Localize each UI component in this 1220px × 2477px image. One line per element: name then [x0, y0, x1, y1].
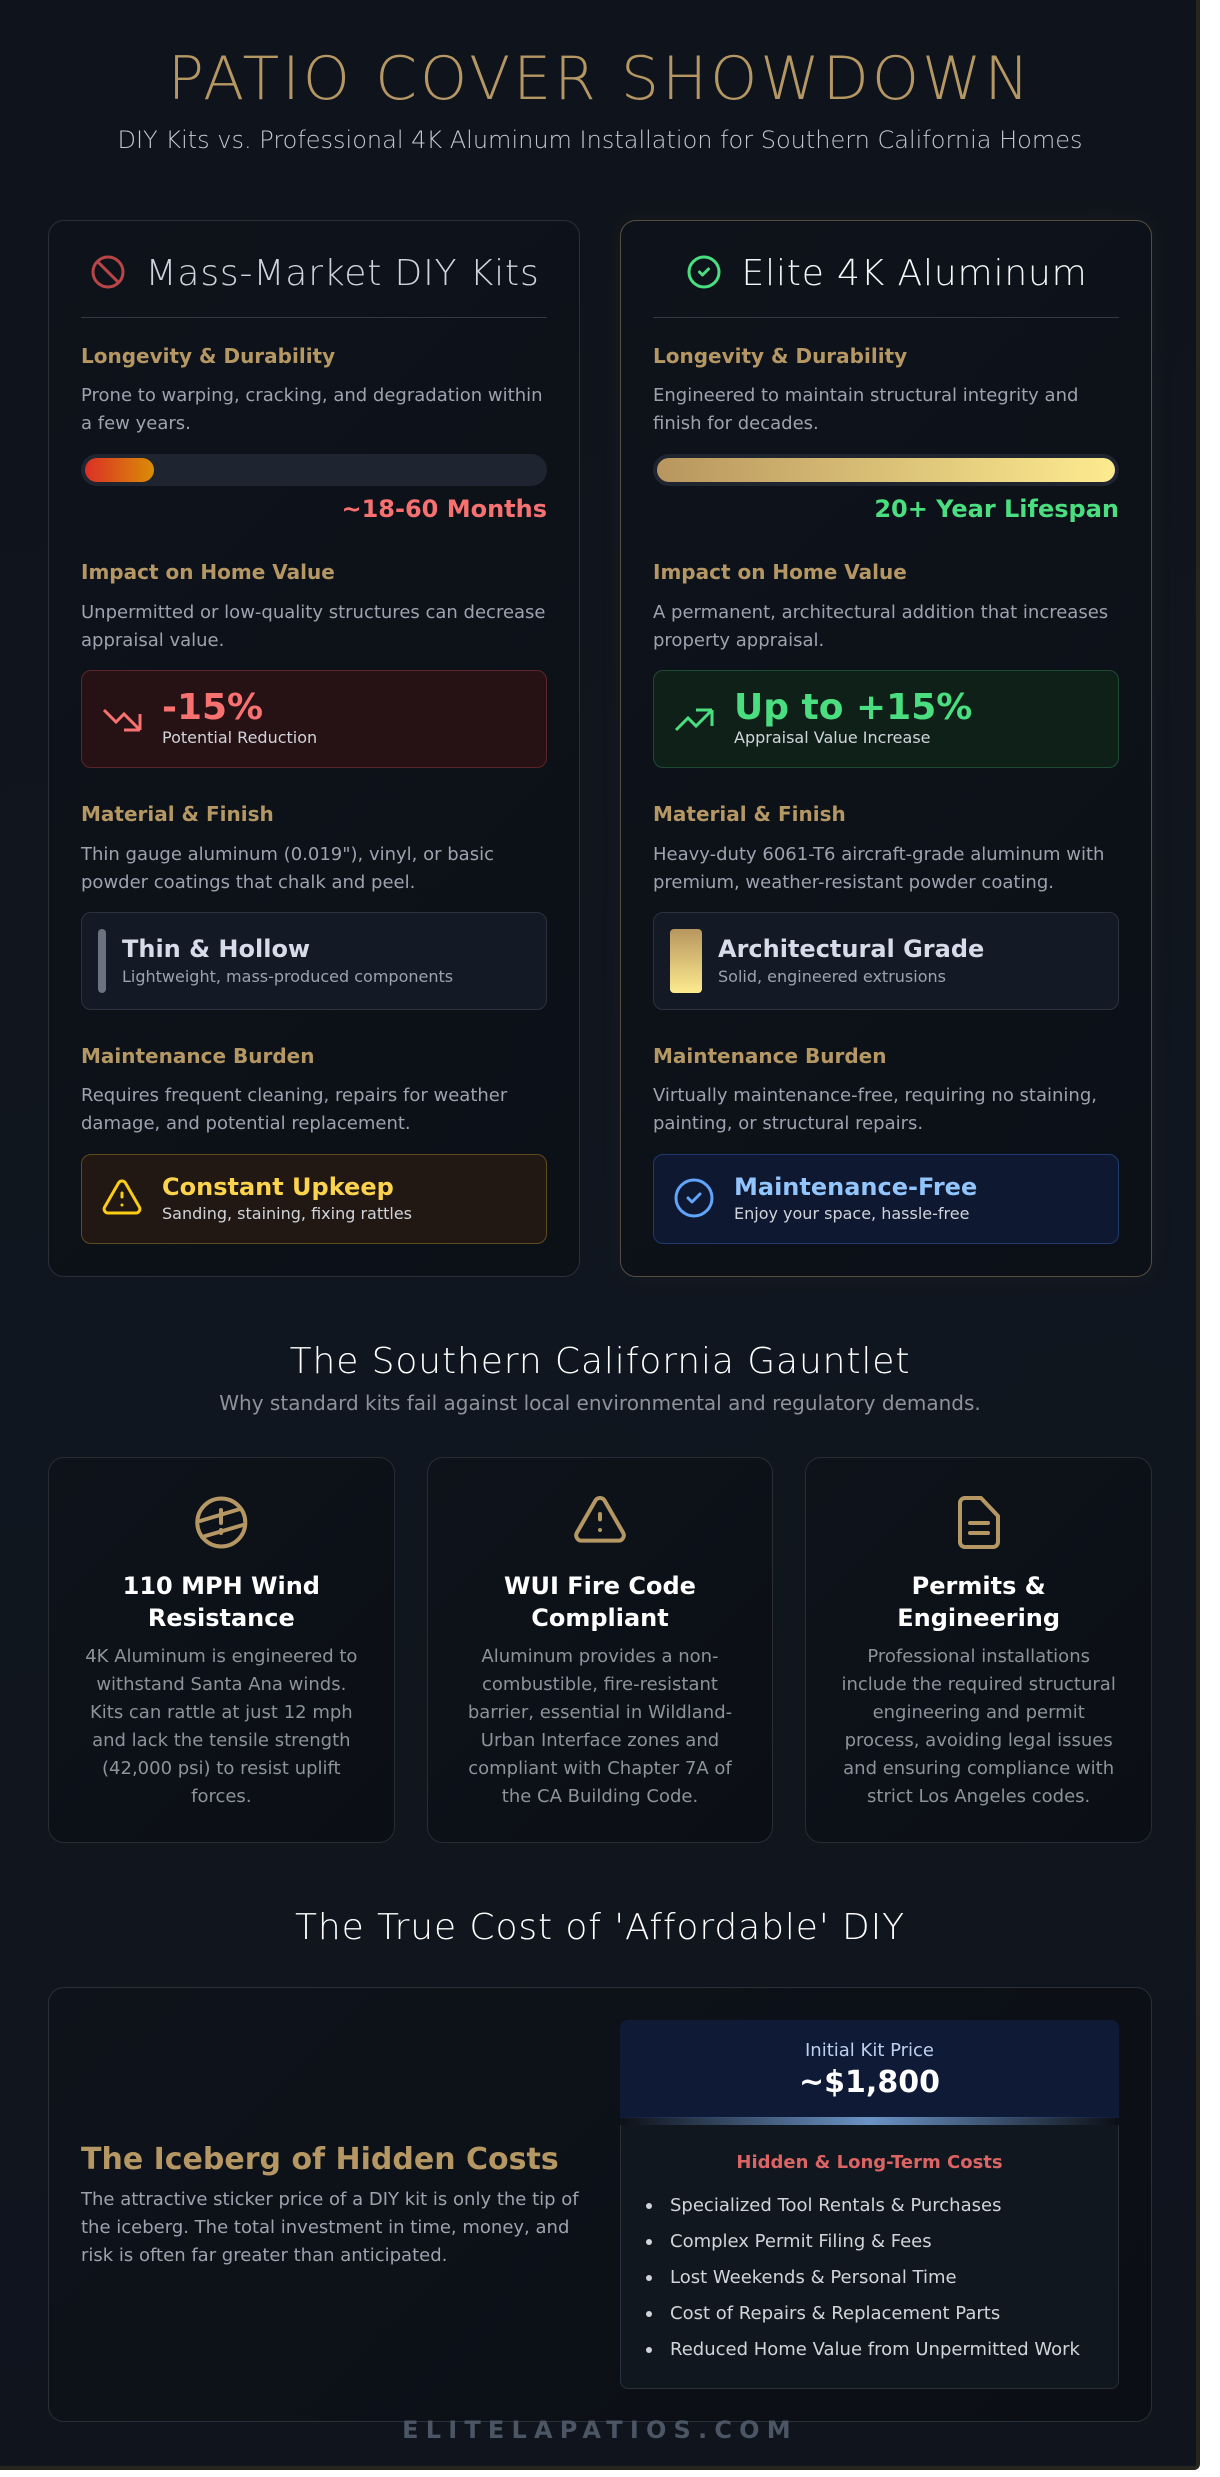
icon: wind [195, 1496, 248, 1548]
callout: potential reduction [81, 670, 547, 768]
card text: include the required structural [841, 1674, 1116, 1695]
card heading: 110 MPH Wind [123, 1572, 320, 1600]
text: home value: appraisal value. [81, 630, 224, 651]
progress bar: lifespan [653, 454, 1119, 486]
card heading: WUI Fire Code [504, 1572, 696, 1600]
card text: forces. [191, 1786, 252, 1807]
list block: hidden costs [620, 2125, 1119, 2389]
text: material [80, 844, 494, 893]
value: lifespan: ~18-60 Months [341, 495, 547, 523]
icon: warning triangle [102, 1180, 142, 1214]
stat value: Up to +15% [734, 687, 972, 728]
header divider line [653, 317, 1119, 318]
price block: initial kit price [620, 2020, 1119, 2118]
heading: iceberg: The Iceberg of Hidden Costs [81, 2142, 559, 2176]
waterline glow [620, 2117, 1119, 2125]
card heading: Permits & [912, 1572, 1046, 1600]
text: maintenance: Virtually maintenance-free, requiring no staining, [653, 1085, 1097, 1106]
heading: home value: Impact on Home Value [81, 560, 335, 584]
card text: withstand Santa Ana winds. [96, 1674, 346, 1695]
heading: maintenance: Maintenance Burden [653, 1044, 886, 1068]
heading: maintenance: Maintenance Burden [81, 1044, 314, 1068]
bullet list: Lost Weekends & Personal Time [670, 2267, 957, 2288]
bullet list: Cost of Repairs & Replacement Parts [670, 2303, 1000, 2324]
progress bar: lifespan [81, 454, 547, 486]
icon: prohibited [92, 256, 124, 288]
callout: appraisal increase [653, 670, 1119, 768]
panel title: Mass-Market DIY Kits [146, 252, 540, 294]
text: maintenance [81, 1085, 508, 1134]
text: maintenance: damage, and potential replacement. [81, 1113, 411, 1134]
panel: iceberg of hidden costs [48, 1987, 1152, 2422]
text: maintenance [653, 1085, 1097, 1134]
icon: trending up [675, 708, 714, 731]
card text: and lack the tensile strength [92, 1730, 351, 1751]
text: material: Thin gauge aluminum (0.019"), vinyl, or basic [81, 844, 494, 864]
callout detail: Enjoy your space, hassle-free [734, 1204, 969, 1223]
callout title: Architectural Grade [718, 935, 984, 963]
card heading [123, 1572, 320, 1632]
title: PATIO COVER SHOWDOWN [168, 44, 1032, 114]
card text: Aluminum provides a non- [481, 1646, 719, 1666]
icon: check circle [674, 1178, 714, 1218]
icon: check circle [688, 256, 720, 288]
panel: permits [805, 1457, 1152, 1843]
callout: architectural grade [653, 912, 1119, 1010]
card text [841, 1646, 1116, 1807]
stat label: Potential Reduction [162, 728, 317, 747]
icon: thin profile bar [98, 929, 106, 993]
section heading: true cost: The True Cost of 'Affordable' DIY [295, 1906, 905, 1948]
footer brand: ELITELAPATIOS.COM [402, 2416, 798, 2444]
card text: (42,000 psi) to resist uplift [102, 1758, 341, 1779]
icon: document [958, 1496, 1000, 1549]
card text: Professional installations [867, 1646, 1090, 1666]
card text: strict Los Angeles codes. [867, 1786, 1090, 1807]
card text: Urban Interface zones and [481, 1730, 719, 1751]
text: longevity [653, 385, 1078, 434]
stat value: -15% [162, 687, 263, 728]
card heading [504, 1572, 696, 1632]
text: home value: Unpermitted or low-quality structures can decrease [81, 602, 546, 623]
panel title: Elite 4K Aluminum [742, 252, 1088, 294]
text: material: premium, weather-resistant powder coating. [653, 872, 1054, 893]
card heading [897, 1572, 1060, 1632]
callout detail: Sanding, staining, fixing rattles [162, 1204, 412, 1223]
card text: barrier, essential in Wildland- [468, 1702, 732, 1723]
list heading: Hidden & Long-Term Costs [736, 2152, 1003, 2172]
section subheading: gauntlet: Why standard kits fail against local environmental and regulatory demands. [219, 1391, 981, 1415]
bullet list: Specialized Tool Rentals & Purchases [670, 2195, 1001, 2216]
progress fill [657, 458, 1115, 482]
icon: trending down [103, 709, 142, 732]
heading: material: Material & Finish [81, 802, 274, 826]
price label: Initial Kit Price [805, 2040, 934, 2061]
card text: the CA Building Code. [502, 1786, 698, 1807]
text: home value: A permanent, architectural addition that increases [653, 602, 1108, 623]
card heading: Resistance [148, 1604, 295, 1632]
subtitle: DIY Kits vs. Professional 4K Aluminum Installation for Southern California Homes [118, 126, 1082, 154]
card text [85, 1646, 357, 1807]
card text: and ensuring compliance with [843, 1758, 1114, 1779]
panel: mass-market DIY kits [48, 220, 580, 1277]
card text: process, avoiding legal issues [845, 1730, 1113, 1751]
bullet list: Reduced Home Value from Unpermitted Work [670, 2339, 1080, 2360]
card text: Kits can rattle at just 12 mph [90, 1702, 353, 1723]
heading: material: Material & Finish [653, 802, 846, 826]
panel: elite 4K aluminum [620, 220, 1152, 1277]
text: iceberg: risk is often far greater than anticipated. [81, 2245, 447, 2266]
card text: combustible, fire-resistant [482, 1674, 718, 1695]
panel: fire code [427, 1457, 773, 1843]
text: home value [653, 602, 1108, 651]
text: home value [81, 602, 546, 651]
text: iceberg: The attractive sticker price of a DIY kit is only the tip of [81, 2189, 579, 2210]
value: lifespan: 20+ Year Lifespan [874, 495, 1119, 523]
card text: compliant with Chapter 7A of [468, 1758, 732, 1779]
callout: thin and hollow [81, 912, 547, 1010]
panel: wind resistance [48, 1457, 395, 1843]
text: iceberg [80, 2189, 579, 2266]
callout: constant upkeep [81, 1154, 547, 1244]
price value: ~$1,800 [799, 2065, 940, 2100]
text: home value: property appraisal. [653, 630, 824, 651]
text: maintenance: painting, or structural repairs. [653, 1113, 923, 1134]
card text: engineering and permit [873, 1702, 1085, 1723]
text: longevity: finish for decades. [653, 413, 819, 434]
callout title: Maintenance-Free [734, 1172, 977, 1200]
icon: solid profile bar [670, 929, 702, 993]
text: material: powder coatings that chalk and peel. [81, 872, 415, 893]
text: material [653, 844, 1104, 893]
bullet list [646, 2195, 1080, 2360]
text: material: Heavy-duty 6061-T6 aircraft-grade aluminum with [653, 844, 1104, 864]
heading: home value: Impact on Home Value [653, 560, 907, 584]
text: longevity [81, 385, 543, 434]
text: longevity: Prone to warping, cracking, and degradation within [81, 385, 543, 406]
heading: longevity: Longevity & Durability [81, 344, 335, 368]
callout title: Constant Upkeep [162, 1172, 394, 1200]
progress fill [85, 458, 154, 482]
callout title: Thin & Hollow [122, 935, 310, 963]
stat label: Appraisal Value Increase [734, 728, 930, 747]
callout detail: Lightweight, mass-produced components [122, 967, 453, 986]
text: maintenance: Requires frequent cleaning, repairs for weather [81, 1085, 507, 1106]
card text [468, 1646, 732, 1807]
card heading: Compliant [531, 1604, 669, 1632]
icon: warning triangle [574, 1496, 626, 1543]
card heading: Engineering [897, 1604, 1060, 1632]
text: longevity: Engineered to maintain structural integrity and [653, 385, 1078, 406]
text: longevity: a few years. [81, 413, 191, 434]
header divider line [81, 317, 547, 318]
callout: maintenance free [653, 1154, 1119, 1244]
card text: 4K Aluminum is engineered to [85, 1646, 357, 1666]
heading: longevity: Longevity & Durability [653, 344, 907, 368]
bullet list: Complex Permit Filing & Fees [670, 2231, 932, 2252]
text: iceberg: the iceberg. The total investment in time, money, and [81, 2217, 569, 2238]
section heading: gauntlet: The Southern California Gauntlet [290, 1340, 910, 1382]
callout detail: Solid, engineered extrusions [718, 967, 946, 986]
